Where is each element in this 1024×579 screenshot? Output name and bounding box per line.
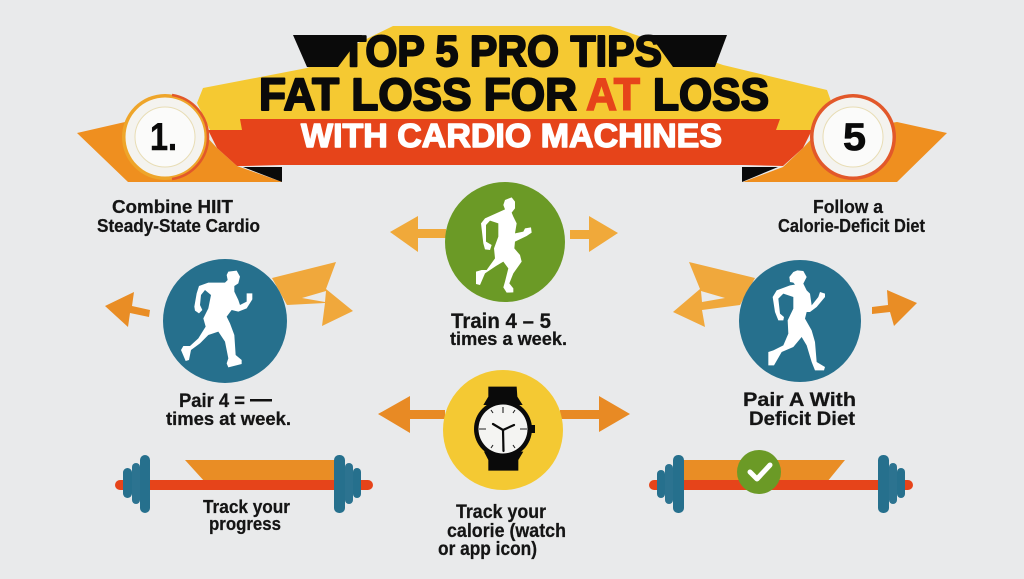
text: track your progress [203,497,290,534]
text: combine HIIT [97,196,260,236]
banner: red ribbon [208,119,812,166]
title line 2: FAT LOSS FOR [259,69,577,120]
arrow: left ribbon arrow [272,262,353,326]
text: track your calorie: or app icon) [438,538,537,560]
text: pair 4 times at week [166,391,291,429]
text: track your progress: Track your [203,497,290,517]
text: pair a with deficit diet: Deficit Diet [749,408,856,430]
icon: green runner [445,182,565,302]
text: track your calorie: calorie (watch [447,520,566,542]
arrow: watch right [560,396,630,432]
text: train 4-5 times a week: Train 4 – 5 [451,310,551,333]
title banner [77,26,947,182]
icon: teal runner right [739,260,861,382]
banner: right black trapezoid [650,35,727,67]
text: train 4-5 times a week: times a week. [450,328,567,349]
banner: left black trapezoid [293,35,362,67]
title line 2: accent word: AT [586,69,640,120]
icon: right barbell with check [649,450,913,513]
arrow: watch left [378,396,445,433]
banner: left orange tail [77,122,282,182]
text: pair 4 times at week: times at week. [166,409,291,429]
text: pair a with deficit diet [743,390,856,430]
icon: watch on yellow circle [443,370,563,490]
text: combine HIIT: Steady-State Cardio [97,215,260,236]
banner: yellow ribbon [197,26,832,130]
title line 1: TOP 5 PRO TIPS [341,27,662,76]
icon: teal runner left [163,259,287,383]
title line 2: last word: LOSS [653,69,769,120]
arrow: top centre right [570,216,618,252]
banner: right orange tail [743,122,947,182]
text: follow a calorie-deficit diet: Follow a [813,196,884,217]
badge: number 5: 5 [843,116,866,159]
text: combine HIIT: Combine HIIT [112,196,234,217]
arrow: right small [872,290,917,326]
text: follow a calorie-deficit diet: Calorie-Deficit Diet [778,215,925,236]
text: pair 4 times at week: Pair 4 = [179,391,245,412]
icon: left barbell [115,455,373,513]
text: train 4-5 times a week [450,310,567,349]
badge: number 1 [122,94,208,180]
title line 3: WITH CARDIO MACHINES [301,117,722,154]
text: track your calorie [438,501,566,560]
text: pair a with deficit diet: Pair A With [743,390,856,411]
text: track your calorie: Track your [456,501,546,523]
arrow: top centre left [390,216,446,252]
badge: number 5 [810,94,896,180]
text: follow a calorie-deficit diet [778,196,925,236]
icon: green check badge [737,450,781,494]
arrow: left small [105,292,150,327]
arrow: right ribbon arrow [673,262,755,327]
banner: left black fold [243,167,282,182]
text: track your progress: progress [209,514,281,534]
banner: right black fold [742,167,778,182]
badge: number 1: 1. [150,116,177,159]
